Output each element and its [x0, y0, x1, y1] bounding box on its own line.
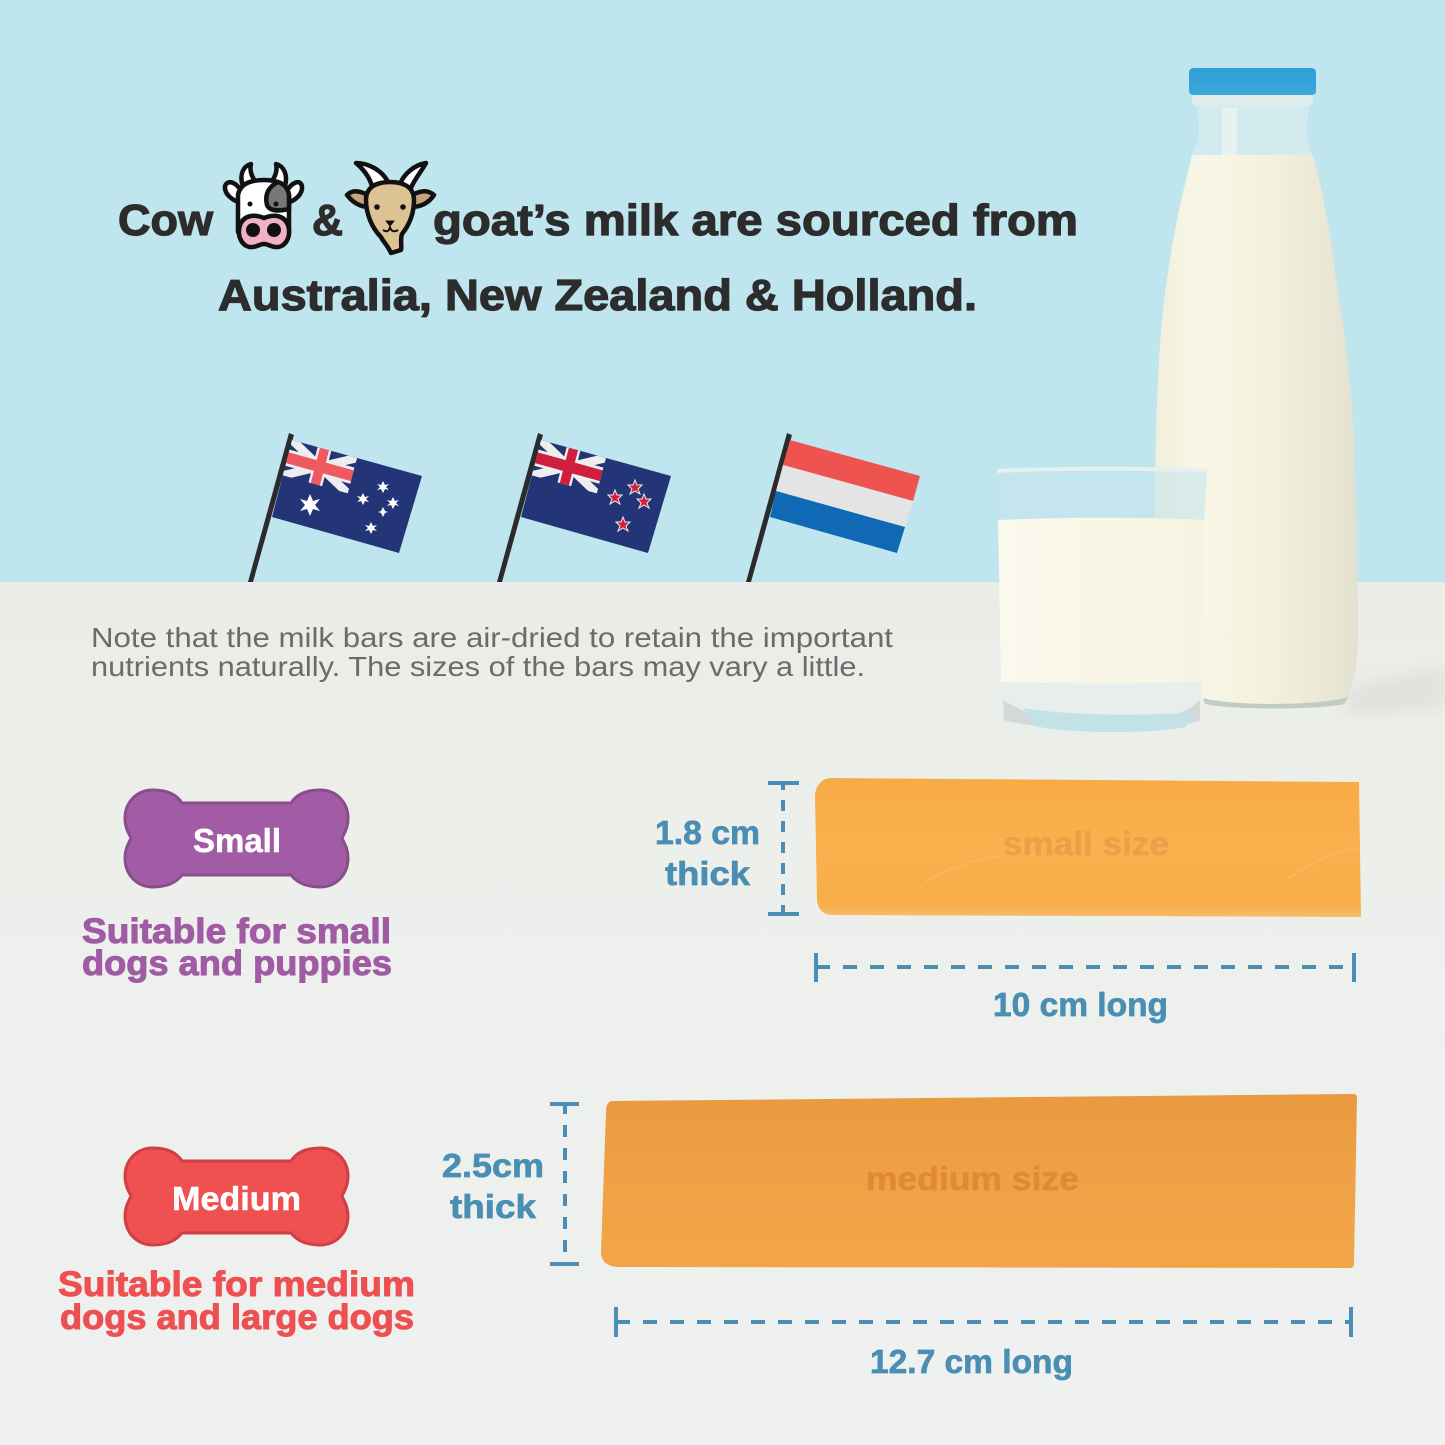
- medium bar thickness label: 2.5cm: [442, 1147, 544, 1184]
- union jack canton: [532, 440, 606, 493]
- bar body: [815, 778, 1361, 917]
- blue cap: [1189, 68, 1316, 95]
- caption line one: Suitable for small: [82, 912, 391, 951]
- heading line one: goat’s milk are sourced from: [433, 196, 1078, 245]
- neck highlight: [1222, 108, 1237, 156]
- flag: Australia: [248, 433, 422, 582]
- union jack canton: [283, 440, 357, 493]
- medium milk bar: [601, 1094, 1357, 1268]
- medium bar length measure: [616, 1307, 1351, 1337]
- small bar thickness label: thick: [665, 855, 751, 892]
- note line one: Note that the milk bars are air-dried to retain the important: [91, 622, 893, 653]
- heading word: and: &: [312, 196, 343, 245]
- bone shape: [125, 1148, 348, 1245]
- flag: Netherlands: [746, 433, 920, 582]
- bar streak: [925, 848, 1358, 882]
- medium suitability caption: [58, 1265, 415, 1337]
- caption line two: dogs and large dogs: [60, 1298, 414, 1337]
- note line two: nutrients naturally. The sizes of the bars may vary a little.: [91, 651, 865, 682]
- glass empty top: [997, 467, 1207, 522]
- small bar thickness label: [655, 814, 760, 892]
- blue stripe: [770, 491, 905, 553]
- bone label: Small: [193, 822, 281, 859]
- note text: [91, 622, 893, 682]
- soft shadow: [1345, 668, 1445, 713]
- bracket: [816, 953, 1354, 982]
- blue reflection: [1023, 708, 1193, 732]
- stars: [608, 480, 651, 531]
- caption line one: Suitable for medium: [58, 1265, 415, 1304]
- photo: milk bottle: [1155, 68, 1445, 713]
- bracket: [616, 1307, 1351, 1337]
- small bar thickness label: 1.8 cm: [655, 814, 760, 851]
- size tag: medium bone: [125, 1148, 348, 1245]
- milk: [1155, 155, 1358, 708]
- small suitability caption: [82, 912, 392, 983]
- bracket: [768, 783, 799, 914]
- flag pole: [248, 433, 294, 582]
- background: white wood table: [0, 582, 1445, 1445]
- small bar thickness measure: [768, 783, 799, 914]
- bracket: [550, 1104, 579, 1264]
- medium bar length label: 12.7 cm long: [870, 1343, 1073, 1380]
- bar body: [601, 1094, 1357, 1268]
- background: sky: [0, 0, 1445, 583]
- glass base: [1001, 682, 1202, 735]
- small bar length measure: [816, 953, 1354, 982]
- small bar length label: 10 cm long: [993, 986, 1168, 1023]
- bottle base rim: [1203, 697, 1348, 708]
- icon: goat: [347, 163, 434, 253]
- glass rim: [997, 467, 1207, 473]
- flag cloth: [272, 440, 422, 553]
- base edge shading: [1003, 700, 1200, 729]
- bar label: medium size: [866, 1160, 1079, 1197]
- red stripe: [783, 440, 920, 501]
- neck ring: [1192, 92, 1313, 106]
- heading word: Cow: Cow: [118, 196, 214, 245]
- caption line two: dogs and puppies: [82, 944, 392, 983]
- flag cloth: [521, 440, 671, 553]
- icon: cow: [225, 164, 302, 247]
- flag pole: [746, 433, 792, 582]
- medium bar thickness label: [442, 1147, 544, 1225]
- bar label: small size: [1003, 825, 1169, 862]
- heading line two: Australia, New Zealand & Holland.: [218, 271, 977, 320]
- stars: [300, 481, 399, 534]
- heading: [118, 196, 1078, 320]
- medium bar thickness measure: [550, 1104, 579, 1264]
- size tag: small bone: [125, 790, 348, 887]
- milk: [998, 518, 1204, 684]
- glass neck: [1192, 100, 1313, 156]
- white stripe: [776, 465, 913, 527]
- small milk bar: [815, 778, 1361, 917]
- medium bar thickness label: thick: [450, 1188, 537, 1225]
- flag pole: [497, 433, 543, 582]
- flag: New Zealand: [497, 433, 671, 582]
- photo: glass of milk: [997, 467, 1207, 735]
- bone shape: [125, 790, 348, 887]
- bone label: Medium: [172, 1180, 301, 1217]
